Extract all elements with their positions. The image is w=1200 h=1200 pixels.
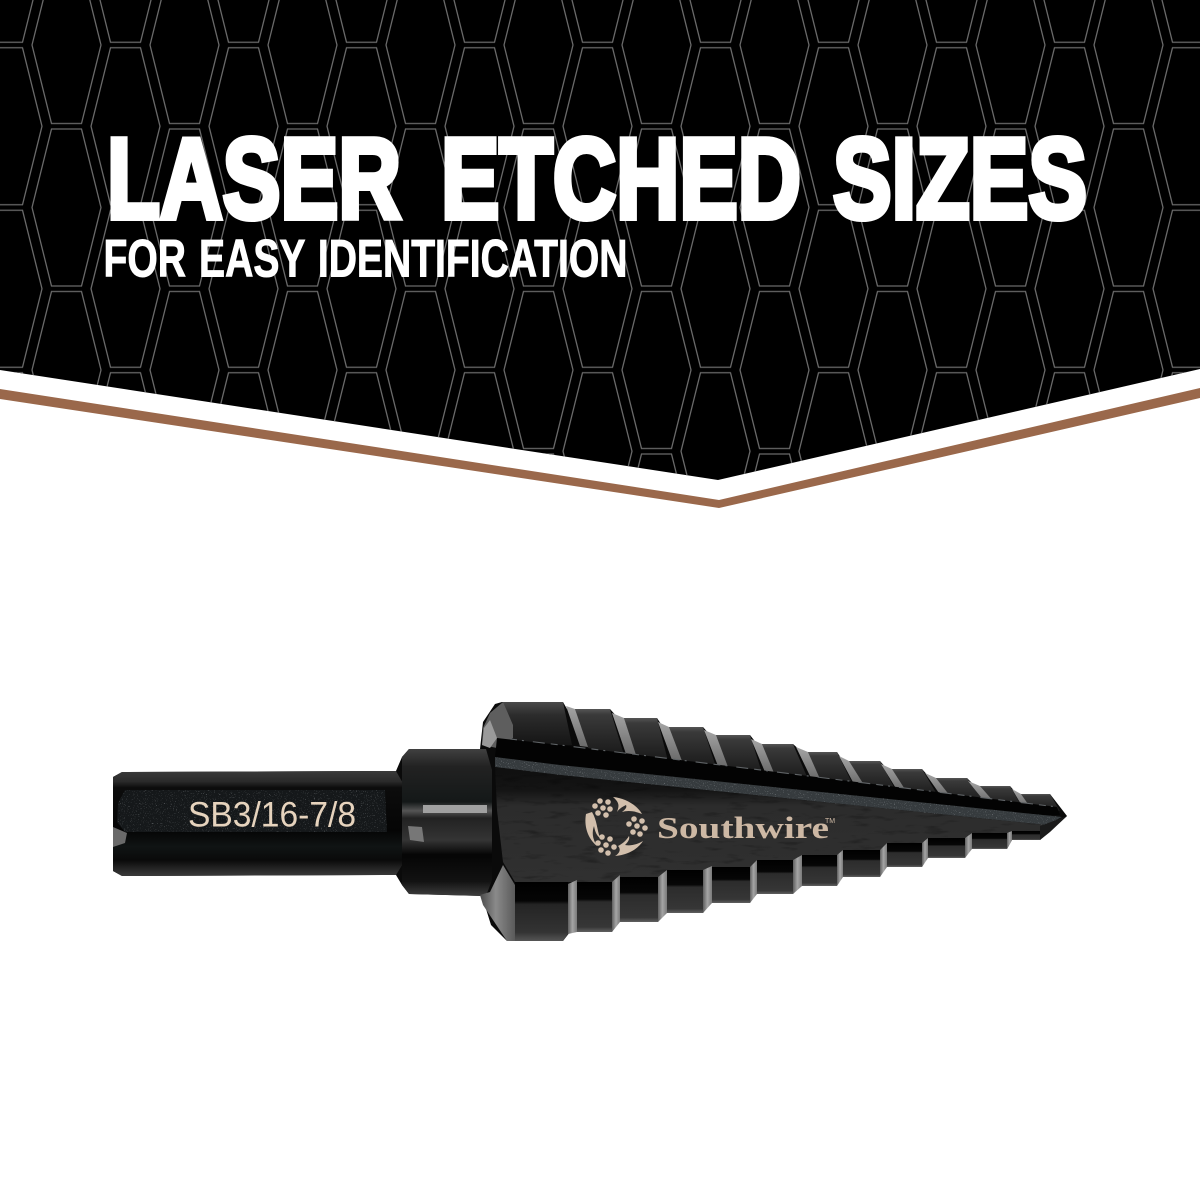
shank end chamfer bbox=[113, 827, 127, 847]
collar left rim highlight bbox=[408, 826, 424, 842]
title: SIZES bbox=[833, 116, 1087, 243]
flange lower bbox=[515, 882, 568, 941]
shank bbox=[113, 771, 404, 876]
title bbox=[107, 116, 1087, 243]
header banner with hexagon pattern bbox=[0, 0, 1200, 480]
flange chamfer upper bbox=[482, 702, 513, 748]
flat face bbox=[495, 767, 1046, 882]
logo dot clusters bbox=[592, 798, 648, 856]
bit silhouette bbox=[113, 702, 1067, 941]
flange upper bbox=[503, 702, 572, 745]
trademark: TM bbox=[825, 818, 835, 825]
etched size text: SB3/16-7/8 bbox=[188, 796, 356, 834]
collar bbox=[402, 749, 492, 896]
flute groove bbox=[495, 738, 1060, 815]
flute land bbox=[495, 757, 1062, 825]
upper steps bbox=[575, 709, 1060, 811]
subtitle: FOR EASY IDENTIFICATION bbox=[104, 230, 628, 288]
groove edge glints bbox=[510, 739, 1057, 807]
copper chevron stripe bbox=[0, 388, 1200, 508]
lower steps bbox=[577, 831, 1040, 932]
flange chamfer upper highlight bbox=[482, 720, 497, 748]
logo wordmark: Southwire bbox=[657, 810, 829, 845]
title: ETCHED bbox=[441, 116, 801, 243]
lower step highlights bbox=[568, 831, 1012, 934]
laser etched flat bbox=[117, 790, 387, 832]
flange chamfer lower bbox=[480, 865, 515, 941]
product photo: step drill bit bbox=[113, 702, 1067, 941]
title: LASER bbox=[107, 116, 401, 243]
logo: Southwire emblem bbox=[585, 797, 648, 856]
collar highlight bbox=[423, 805, 487, 813]
logo swooshes bbox=[585, 797, 643, 856]
drill tip bbox=[1040, 816, 1067, 840]
upper step highlights bbox=[566, 706, 1030, 807]
